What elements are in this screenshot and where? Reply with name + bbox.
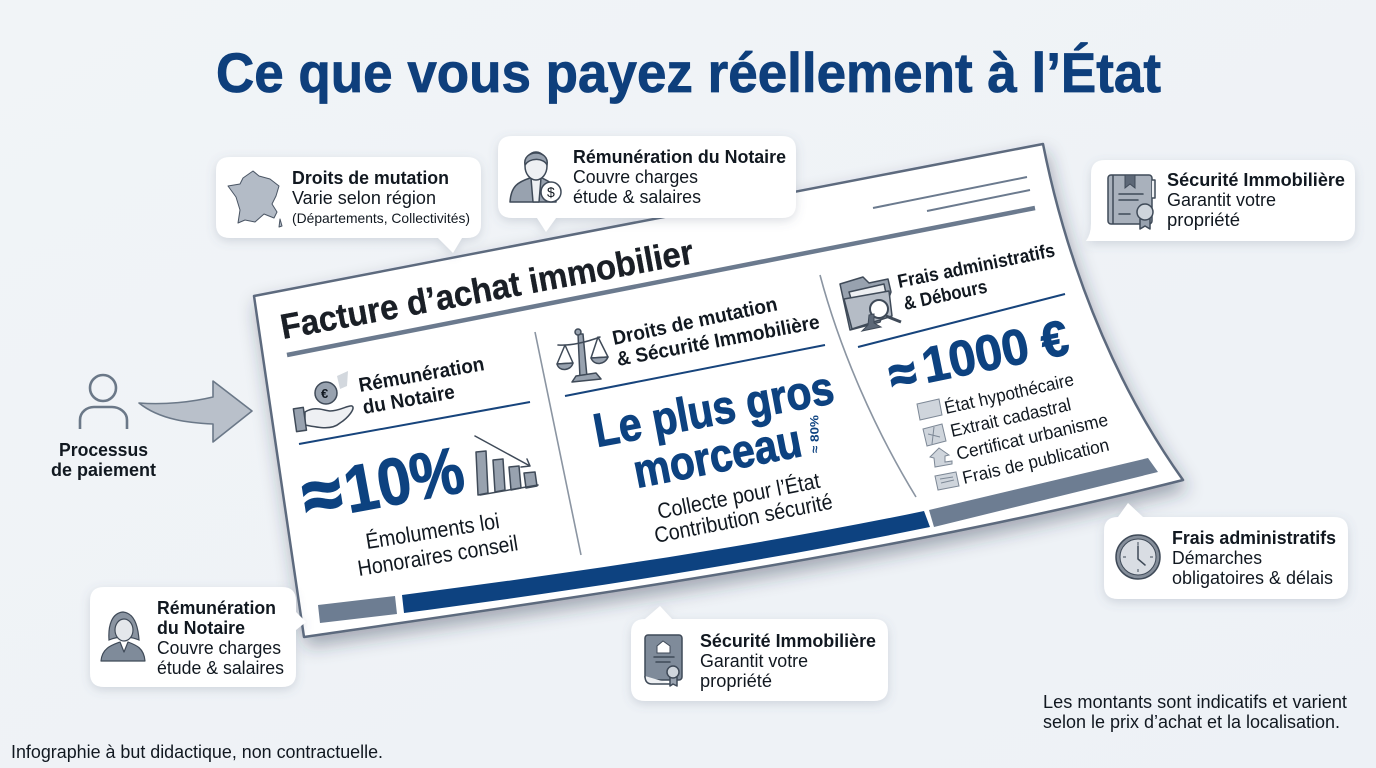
icon: person	[80, 375, 127, 429]
callout: transfer duties by region	[216, 157, 481, 253]
callout text: Rémunération	[157, 598, 276, 618]
amount: approx 1000 euros: ≈	[884, 344, 921, 404]
callout text	[573, 147, 786, 207]
column: notary fee	[293, 353, 538, 581]
note: amounts	[1043, 692, 1347, 732]
headline: biggest share	[589, 360, 838, 498]
label: Processus	[59, 440, 148, 460]
icon: map of France	[228, 171, 282, 227]
list item: État hypothécaire	[942, 369, 1076, 418]
icon: notary man with dollar coin: $	[547, 184, 555, 200]
callout text: Garantit votre	[1167, 190, 1276, 210]
icon: notary man with dollar coin	[510, 152, 561, 202]
column heading: Droits de mutation	[610, 293, 779, 350]
invoice heading: Facture d’achat immobilier	[277, 232, 697, 347]
icon: newspaper	[935, 472, 959, 490]
column description: Contribution sécurité	[652, 489, 835, 548]
note: amounts: Les montants sont indicatifs et varient	[1043, 692, 1347, 712]
icon: mortgage map	[917, 399, 942, 420]
list item: Certificat urbanisme	[954, 410, 1110, 464]
callout text: Droits de mutation	[292, 168, 449, 188]
callout text: Sécurité Immobilière	[700, 631, 876, 651]
column description: Émoluments loi	[364, 508, 501, 554]
amount: approx 10 percent: ≈	[297, 453, 347, 536]
invoice sheet	[254, 144, 1183, 637]
list item: Frais de publication	[960, 435, 1111, 488]
icon: hand with coin: €	[321, 386, 328, 401]
icon: certificate book	[1108, 175, 1155, 229]
sheet outline	[254, 144, 1183, 637]
headline: biggest share: morceau	[629, 413, 806, 498]
headline: biggest share: Le plus gros	[589, 360, 838, 457]
amount: approx 10 percent	[297, 432, 470, 536]
title: Ce que vous payez réellement à l’État	[216, 41, 1161, 104]
callout text	[1172, 528, 1336, 588]
column description: Honoraires conseil	[356, 530, 520, 581]
callout text: propriété	[700, 671, 772, 691]
icon: notary woman	[101, 612, 145, 661]
label	[51, 440, 156, 480]
callout text	[700, 631, 876, 691]
column: transfer duties	[557, 293, 838, 548]
callout text: Sécurité Immobilière	[1167, 170, 1345, 190]
amount: approx 10 percent: 10%	[338, 432, 470, 527]
header rules	[287, 177, 1035, 355]
callout text	[292, 168, 470, 226]
icon: folder with magnifier and stamp	[840, 277, 901, 331]
column heading: du Notaire	[361, 381, 456, 419]
callout text	[157, 598, 284, 678]
column dividers	[535, 275, 916, 555]
amount: approx 1000 euros: 1000 €	[917, 309, 1073, 394]
fee list	[917, 369, 1111, 490]
callout text: Couvre charges	[573, 167, 698, 187]
proportion bar	[318, 458, 1158, 623]
column heading: Frais administratifs	[896, 240, 1057, 293]
callout text: Couvre charges	[157, 638, 281, 658]
callout text: propriété	[1167, 210, 1240, 230]
callout text	[1167, 170, 1345, 230]
column description	[356, 508, 520, 581]
note: amounts: selon le prix d’achat et la localisation.	[1043, 712, 1340, 732]
list item: Extrait cadastral	[948, 394, 1073, 441]
callout: property security top	[1086, 160, 1355, 241]
callout text: obligatoires & délais	[1172, 568, 1333, 588]
callout text: Garantit votre	[700, 651, 808, 671]
callout: notary fee male	[498, 136, 796, 232]
callout: admin fees	[1104, 503, 1348, 599]
arrow to invoice	[139, 381, 252, 442]
column heading	[896, 240, 1057, 315]
icon: cadastral map	[923, 424, 946, 446]
callout text: Démarches	[1172, 548, 1262, 568]
icon: clock	[1116, 535, 1160, 579]
icon: property deed book	[645, 635, 682, 686]
column heading	[357, 353, 486, 419]
callout text: étude & salaires	[573, 187, 701, 207]
callout text: étude & salaires	[157, 658, 284, 678]
footer disclaimer: Infographie à but didactique, non contractuelle.	[11, 742, 383, 762]
icon: house	[930, 448, 952, 467]
label: de paiement	[51, 460, 156, 480]
callout text: Varie selon région	[292, 188, 436, 208]
column: admin fees	[840, 240, 1111, 490]
icon: hand with coin	[293, 371, 353, 432]
column description: Collecte pour l’État	[655, 468, 822, 524]
callout text: du Notaire	[157, 618, 245, 638]
callout: property security bottom	[631, 606, 888, 701]
label: approx 80 percent: ≈ 80%	[807, 415, 822, 453]
callout text: Rémunération du Notaire	[573, 147, 786, 167]
column heading: & Débours	[902, 277, 989, 315]
payment process	[51, 375, 252, 480]
callout text: Frais administratifs	[1172, 528, 1336, 548]
column heading: & Sécurité Immobilière	[615, 311, 821, 371]
callout text: (Départements, Collectivités)	[292, 210, 470, 226]
icon: falling bar chart	[475, 436, 538, 495]
icon: scales	[557, 329, 608, 382]
column heading: Rémunération	[357, 353, 486, 397]
callout: notary fee female	[90, 587, 306, 687]
